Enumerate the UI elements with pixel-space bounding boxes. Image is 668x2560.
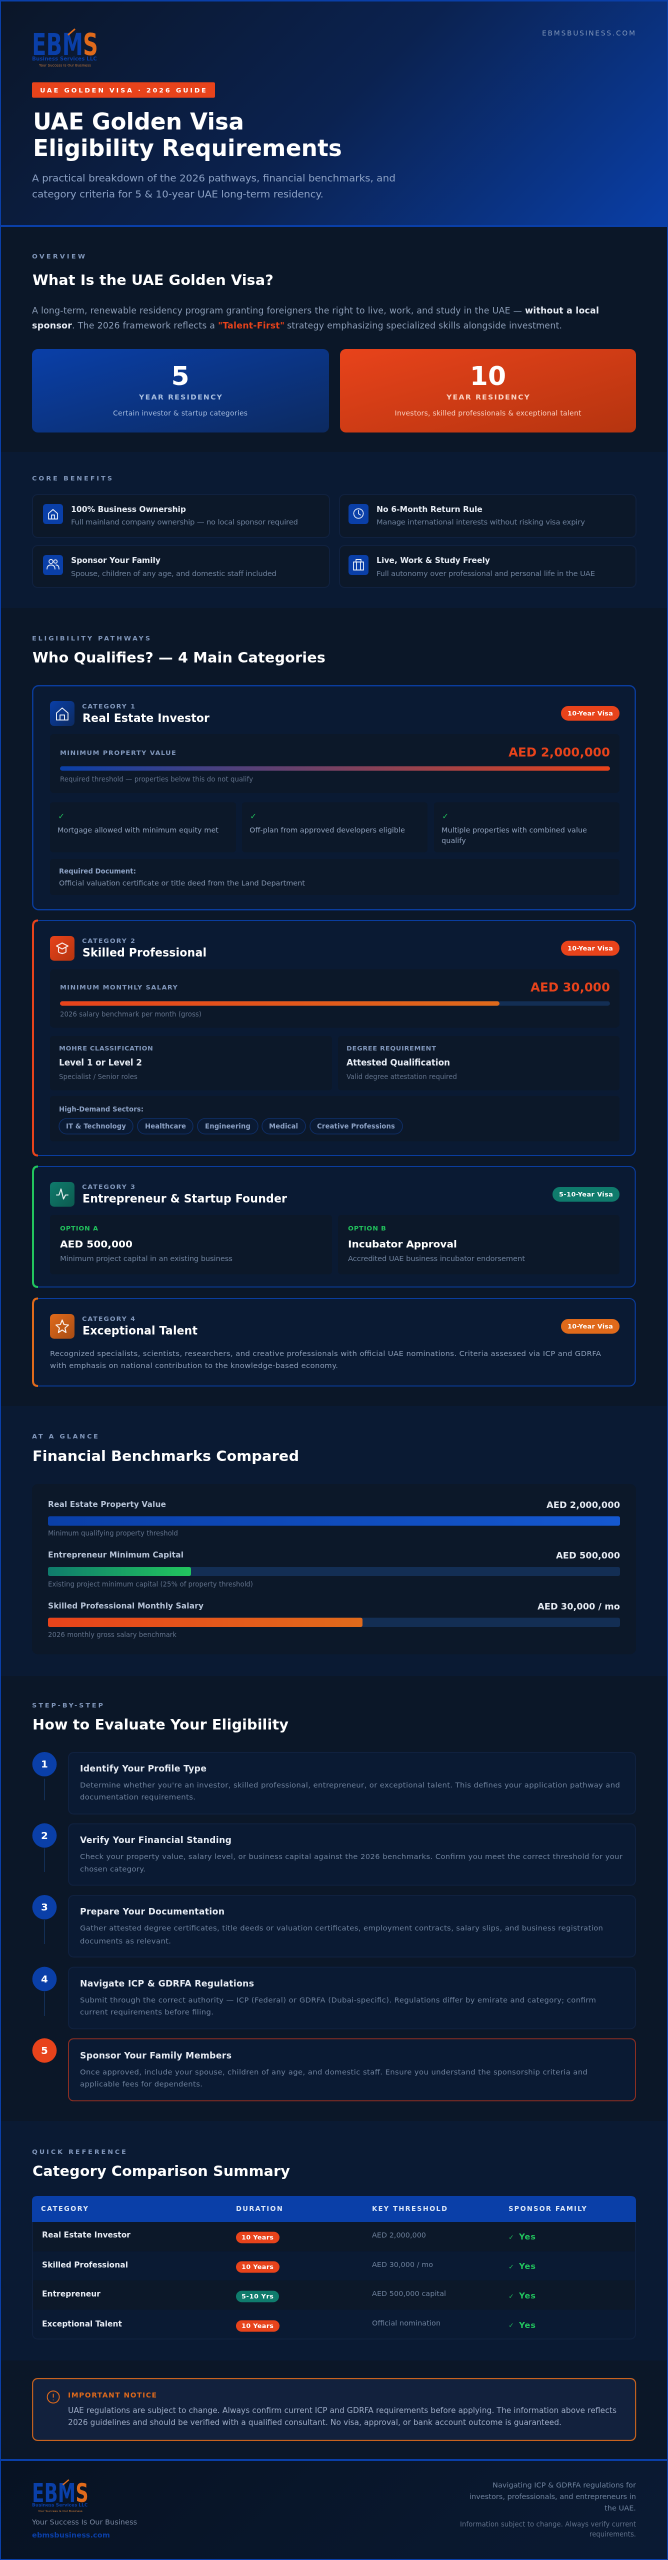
high-demand sectors: Healthcare bbox=[145, 1123, 186, 1131]
header panel bbox=[0, 0, 668, 227]
benchmarks heading: Financial Benchmarks Compared bbox=[32, 1449, 299, 1465]
step 3 bbox=[32, 1895, 636, 1957]
benefit: business ownership: 100% Business Ownership bbox=[71, 505, 186, 514]
benefit: business ownership bbox=[32, 494, 330, 538]
overview paragraph: strategy emphasizing specialized skills alongside investment. bbox=[287, 322, 562, 332]
step 5: Sponsor Your Family Members bbox=[80, 2051, 232, 2061]
notice panel: UAE regulations are subject to change. Always confirm current ICP and GDRFA requirements before applying. The information above reflects bbox=[68, 2406, 616, 2415]
row: skilled professional: ✓ bbox=[508, 2263, 514, 2271]
overview paragraph: sponsor bbox=[32, 322, 73, 332]
step 5: 5 bbox=[41, 2046, 48, 2057]
logo: Your Success Is Our Business bbox=[39, 64, 91, 68]
steps label: STEP-BY-STEP bbox=[32, 1701, 103, 1709]
category card 4: exceptional talent bbox=[33, 1298, 635, 1386]
quick reference label: QUICK REFERENCE bbox=[32, 2148, 126, 2156]
title bbox=[33, 109, 342, 162]
comparison table bbox=[32, 2196, 636, 2339]
row: real estate investor: Yes bbox=[518, 2232, 536, 2242]
required document: Official valuation certificate or title deed from the Land Department bbox=[59, 878, 305, 887]
row: real estate investor bbox=[42, 2230, 536, 2243]
step 4: 4 bbox=[41, 1974, 48, 1986]
icon: house bbox=[50, 701, 74, 726]
talent description bbox=[50, 1349, 602, 1370]
pill: 10-year visa bbox=[561, 941, 620, 956]
row: exceptional talent: 10 Years bbox=[242, 2322, 274, 2330]
notice panel: 2026 guidelines and should be verified with a qualified consultant. No visa, approval, or bank account outcome is guaranteed. bbox=[68, 2418, 562, 2427]
row: skilled professional: 10 Years bbox=[242, 2263, 274, 2271]
step 1: 1 bbox=[41, 1760, 48, 1771]
step 4 bbox=[32, 1967, 636, 2029]
step 4: Submit through the correct authority — ICP (Federal) or GDRFA (Dubai-specific). Regulations differ by emirate and category; confirm bbox=[80, 1995, 596, 2004]
option B bbox=[338, 1215, 620, 1274]
check: mortgage: ✓ bbox=[58, 812, 65, 821]
section: quick reference bbox=[0, 2121, 668, 2360]
MOHRE classification: MOHRE CLASSIFICATION bbox=[59, 1045, 153, 1053]
bar: real estate: AED 2,000,000 bbox=[546, 1501, 620, 1511]
degree requirement: Valid degree attestation required bbox=[346, 1073, 457, 1081]
threshold panel bbox=[50, 734, 620, 793]
high-demand sectors: Medical bbox=[269, 1123, 298, 1131]
logo: S bbox=[83, 28, 98, 63]
salary panel: MINIMUM MONTHLY SALARY bbox=[60, 983, 178, 991]
footer logo: S bbox=[76, 2479, 88, 2509]
benefit: return rule bbox=[340, 494, 636, 538]
MOHRE classification: Specialist / Senior roles bbox=[59, 1073, 138, 1081]
row: exceptional talent: Exceptional Talent bbox=[42, 2319, 122, 2328]
category card 1: real estate investor bbox=[33, 686, 635, 910]
benefit: sponsor family: Sponsor Your Family bbox=[71, 556, 160, 565]
stat card: 5 year residency: YEAR RESIDENCY bbox=[138, 393, 223, 402]
stat card: 10 year residency: YEAR RESIDENCY bbox=[446, 393, 530, 402]
high-demand sectors: High-Demand Sectors: bbox=[59, 1105, 144, 1113]
logo: EBM bbox=[32, 28, 83, 63]
overview paragraph: without a local bbox=[525, 307, 599, 317]
overview paragraph: A long-term, renewable residency program granting foreigners the right to live, work, and study in the UAE — bbox=[32, 307, 522, 317]
row: real estate investor: AED 2,000,000 bbox=[372, 2230, 426, 2239]
footer bbox=[0, 2459, 668, 2560]
option B: Incubator Approval bbox=[348, 1239, 457, 1250]
category card 2: skilled professional bbox=[33, 920, 635, 1156]
step 2: 2 bbox=[41, 1831, 48, 1842]
footer disclaimer bbox=[460, 2521, 636, 2539]
icon: pulse bbox=[50, 1182, 74, 1207]
pill: 10-year visa bbox=[561, 1319, 620, 1334]
step 5: Once approved, include your spouse, children of any age, and domestic staff. Ensure you understand the sponsorship criteria and bbox=[80, 2067, 588, 2076]
bar: skilled professional bbox=[48, 1601, 620, 1639]
quick reference heading: Category Comparison Summary bbox=[32, 2164, 291, 2180]
pill: 5-10-year visa bbox=[552, 1187, 620, 1202]
row: entrepreneur: Yes bbox=[518, 2291, 536, 2301]
row: entrepreneur: ✓ bbox=[508, 2292, 514, 2300]
steps heading: How to Evaluate Your Eligibility bbox=[32, 1718, 289, 1734]
category card 3: entrepreneur: Entrepreneur & Startup Founder bbox=[82, 1193, 288, 1206]
stat card: 10 year residency bbox=[340, 349, 636, 432]
pill: 10-year visa: 10-Year Visa bbox=[568, 945, 613, 953]
required document bbox=[50, 859, 620, 895]
overview paragraph bbox=[32, 307, 599, 332]
overview paragraph: . The 2026 framework reflects a bbox=[72, 322, 215, 332]
bar: entrepreneur: AED 500,000 bbox=[556, 1552, 620, 1562]
salary panel: AED 30,000 bbox=[530, 980, 610, 994]
step 3: documents as relevant. bbox=[80, 1936, 171, 1945]
row: real estate investor: ✓ bbox=[508, 2233, 514, 2241]
footer logo: Your Success Is Our Business bbox=[38, 2509, 83, 2513]
category card 4: exceptional talent: CATEGORY 4 bbox=[82, 1315, 135, 1323]
row: skilled professional: Skilled Professional bbox=[42, 2260, 128, 2269]
eligibility heading: Who Qualifies? — 4 Main Categories bbox=[32, 651, 326, 667]
step 1 bbox=[32, 1752, 636, 1814]
icon: alert bbox=[47, 2391, 59, 2403]
bar: entrepreneur bbox=[48, 1551, 620, 1588]
row: entrepreneur: AED 500,000 capital bbox=[372, 2289, 446, 2298]
benchmarks label: AT A GLANCE bbox=[32, 1433, 98, 1441]
overview heading: What Is the UAE Golden Visa? bbox=[32, 273, 274, 289]
stat card: 5 year residency: 5 bbox=[171, 362, 189, 392]
row: skilled professional: Yes bbox=[518, 2261, 536, 2271]
step 1: documentation requirements. bbox=[80, 1793, 196, 1802]
row: skilled professional: AED 30,000 / mo bbox=[372, 2260, 433, 2269]
benefit: sponsor family bbox=[32, 546, 330, 588]
threshold panel: Required threshold — properties below this do not qualify bbox=[60, 775, 253, 783]
title: UAE Golden Visa bbox=[33, 109, 244, 135]
step 2: chosen category. bbox=[80, 1865, 146, 1874]
step 1: Determine whether you're an investor, skilled professional, entrepreneur, or exceptional talent. This defines your application pathway and bbox=[80, 1781, 620, 1790]
pill: 10-year visa: 10-Year Visa bbox=[568, 710, 613, 718]
icon: star bbox=[50, 1314, 74, 1339]
degree requirement: DEGREE REQUIREMENT bbox=[346, 1045, 437, 1053]
check: off-plan: ✓ bbox=[250, 812, 257, 821]
step 2: Check your property value, salary level, or business capital against the 2026 benchmarks. Confirm you meet the correct threshold for your bbox=[80, 1852, 623, 1861]
table header: KEY THRESHOLD bbox=[372, 2205, 447, 2213]
row: entrepreneur bbox=[42, 2289, 536, 2302]
section: overview bbox=[0, 227, 668, 452]
footer description: Navigating ICP & GDRFA regulations for bbox=[492, 2481, 636, 2490]
row: real estate investor: Real Estate Investor bbox=[42, 2231, 131, 2240]
category card 3: entrepreneur: CATEGORY 3 bbox=[82, 1183, 135, 1191]
bar: skilled professional: Skilled Professional Monthly Salary bbox=[48, 1601, 204, 1610]
website label: EBMSBUSINESS.COM bbox=[542, 29, 635, 37]
option A: Minimum project capital in an existing business bbox=[60, 1254, 233, 1263]
footer description: investors, professionals, and entrepreneurs in bbox=[470, 2492, 636, 2501]
talent description: Recognized specialists, scientists, researchers, and creative professionals with official UAE nominations. Criteria assessed via ICP and GDRFA bbox=[50, 1349, 602, 1358]
check: off-plan bbox=[242, 802, 428, 852]
notice panel: IMPORTANT NOTICE bbox=[68, 2392, 157, 2400]
benefit: sponsor family: Spouse, children of any age, and domestic staff included bbox=[71, 569, 277, 578]
step 4: current requirements before filing. bbox=[80, 2008, 214, 2017]
stat card: 10 year residency: Investors, skilled professionals & exceptional talent bbox=[395, 410, 582, 418]
bar: entrepreneur: Entrepreneur Minimum Capital bbox=[48, 1551, 184, 1560]
footer logo: EBM bbox=[32, 2479, 76, 2509]
category card 3: entrepreneur bbox=[33, 1166, 635, 1287]
section: core benefits bbox=[0, 452, 668, 608]
threshold panel: MINIMUM PROPERTY VALUE bbox=[60, 749, 176, 757]
check: mortgage: Mortgage allowed with minimum equity met bbox=[58, 826, 219, 835]
benefit: live work study: Live, Work & Study Freely bbox=[376, 556, 490, 565]
bar: real estate: Real Estate Property Value bbox=[48, 1500, 166, 1509]
stat card: 5 year residency bbox=[32, 349, 329, 432]
required document: Required Document: bbox=[59, 867, 136, 875]
check: multiple properties: qualify bbox=[442, 836, 467, 845]
bar: skilled professional: 2026 monthly gross salary benchmark bbox=[48, 1631, 177, 1639]
category card 2: skilled professional: Skilled Professional bbox=[82, 947, 206, 960]
category card 1: real estate investor: Real Estate Investor bbox=[82, 712, 210, 725]
step 5: applicable fees for dependents. bbox=[80, 2079, 202, 2088]
stat card: 10 year residency: 10 bbox=[470, 362, 506, 392]
option B: OPTION B bbox=[348, 1224, 386, 1232]
section: steps bbox=[0, 1676, 668, 2121]
check: multiple properties bbox=[434, 802, 620, 852]
section: eligibility pathways bbox=[0, 608, 668, 1406]
bar chart panel bbox=[32, 1484, 636, 1654]
high-demand sectors: Engineering bbox=[205, 1123, 251, 1131]
footer link: ebmsbusiness.com bbox=[32, 2531, 110, 2540]
bar: skilled professional: AED 30,000 / mo bbox=[538, 1602, 620, 1612]
salary panel: 2026 salary benchmark per month (gross) bbox=[60, 1010, 202, 1018]
MOHRE classification bbox=[50, 1036, 332, 1090]
high-demand sectors: IT & Technology bbox=[66, 1123, 127, 1131]
option A: OPTION A bbox=[60, 1224, 98, 1232]
row: entrepreneur: Entrepreneur bbox=[42, 2290, 101, 2299]
step 2: Verify Your Financial Standing bbox=[80, 1836, 232, 1846]
degree requirement bbox=[338, 1036, 620, 1090]
category card 2: skilled professional: CATEGORY 2 bbox=[82, 937, 135, 945]
row: real estate investor: 10 Years bbox=[242, 2234, 274, 2242]
bar: real estate: Minimum qualifying property threshold bbox=[48, 1530, 178, 1538]
talent description: with emphasis on national contribution to the knowledge-based economy. bbox=[50, 1361, 338, 1370]
high-demand sectors bbox=[50, 1096, 620, 1141]
guide badge: UAE GOLDEN VISA · 2026 GUIDE bbox=[40, 86, 206, 94]
option A: AED 500,000 bbox=[60, 1239, 132, 1250]
footer disclaimer: requirements. bbox=[590, 2531, 636, 2539]
category card 4: exceptional talent: Exceptional Talent bbox=[82, 1325, 198, 1338]
degree requirement: Attested Qualification bbox=[346, 1059, 450, 1069]
table header: CATEGORY bbox=[41, 2205, 88, 2213]
logo: Business Services LLC bbox=[32, 56, 97, 62]
step 3: Gather attested degree certificates, title deeds or valuation certificates, employment contracts, salary slips, and business registration bbox=[80, 1924, 603, 1933]
benefit: return rule: No 6-Month Return Rule bbox=[376, 505, 482, 514]
pill: 10-year visa: 10-Year Visa bbox=[568, 1323, 613, 1331]
footer description: the UAE. bbox=[604, 2503, 636, 2512]
table header: DURATION bbox=[236, 2205, 282, 2213]
step 1: Identify Your Profile Type bbox=[80, 1765, 207, 1775]
footer disclaimer: Information subject to change. Always verify current bbox=[460, 2521, 636, 2529]
pill: 5-10-year visa: 5-10-Year Visa bbox=[559, 1191, 613, 1199]
threshold panel: AED 2,000,000 bbox=[508, 745, 610, 759]
overview label: OVERVIEW bbox=[32, 252, 85, 260]
salary panel bbox=[50, 969, 620, 1028]
check: off-plan: Off-plan from approved developers eligible bbox=[250, 826, 406, 835]
category card 1: real estate investor: CATEGORY 1 bbox=[82, 702, 135, 710]
subtitle: A practical breakdown of the 2026 pathways, financial benchmarks, and bbox=[32, 174, 396, 185]
step 5 bbox=[32, 2038, 636, 2101]
bar: real estate bbox=[48, 1500, 620, 1538]
eligibility label: ELIGIBILITY PATHWAYS bbox=[32, 635, 150, 643]
bar: entrepreneur: Existing project minimum capital (25% of property threshold) bbox=[48, 1580, 253, 1588]
check: mortgage bbox=[50, 802, 236, 852]
benefit: live work study bbox=[340, 546, 636, 588]
check: multiple properties: Multiple properties with combined value bbox=[442, 826, 588, 835]
subtitle: category criteria for 5 & 10-year UAE long-term residency. bbox=[32, 189, 324, 200]
section: important notice bbox=[0, 2360, 668, 2460]
subtitle bbox=[32, 174, 396, 200]
table header bbox=[32, 2196, 636, 2222]
MOHRE classification: Level 1 or Level 2 bbox=[59, 1059, 142, 1069]
row: skilled professional bbox=[42, 2260, 536, 2273]
guide badge bbox=[32, 82, 215, 98]
pill: 10-year visa bbox=[561, 706, 620, 721]
footer tagline: Your Success Is Our Business bbox=[31, 2517, 137, 2526]
notice panel bbox=[33, 2379, 636, 2440]
table header: SPONSOR FAMILY bbox=[508, 2205, 587, 2213]
section: financial benchmarks bbox=[0, 1406, 668, 1676]
step 4: Navigate ICP & GDRFA Regulations bbox=[80, 1979, 254, 1989]
benefit: return rule: Manage international interests without risking visa expiry bbox=[376, 518, 586, 527]
footer description bbox=[470, 2481, 636, 2512]
title: Eligibility Requirements bbox=[33, 136, 342, 162]
core benefits label: CORE BENEFITS bbox=[32, 474, 112, 482]
row: exceptional talent bbox=[42, 2319, 536, 2332]
overview paragraph: "Talent-First" bbox=[218, 322, 284, 332]
row: exceptional talent: Yes bbox=[518, 2320, 536, 2330]
row: exceptional talent: Official nomination bbox=[372, 2319, 440, 2328]
check: multiple properties: ✓ bbox=[442, 812, 449, 821]
benefit: business ownership: Full mainland company ownership — no local sponsor required bbox=[71, 518, 298, 527]
step 3: Prepare Your Documentation bbox=[80, 1908, 224, 1918]
high-demand sectors: Creative Professions bbox=[317, 1123, 395, 1131]
row: entrepreneur: 5-10 Yrs bbox=[242, 2293, 274, 2301]
row: exceptional talent: ✓ bbox=[508, 2322, 514, 2330]
option B: Accredited UAE business incubator endorsement bbox=[348, 1254, 525, 1263]
step 2 bbox=[32, 1823, 636, 1885]
step 3: 3 bbox=[41, 1903, 48, 1914]
benefit: live work study: Full autonomy over professional and personal life in the UAE bbox=[376, 569, 595, 578]
option A bbox=[50, 1215, 332, 1274]
stat card: 5 year residency: Certain investor & startup categories bbox=[113, 410, 248, 418]
footer logo: Business Services LLC bbox=[32, 2503, 88, 2509]
icon: graduation cap bbox=[50, 936, 74, 961]
